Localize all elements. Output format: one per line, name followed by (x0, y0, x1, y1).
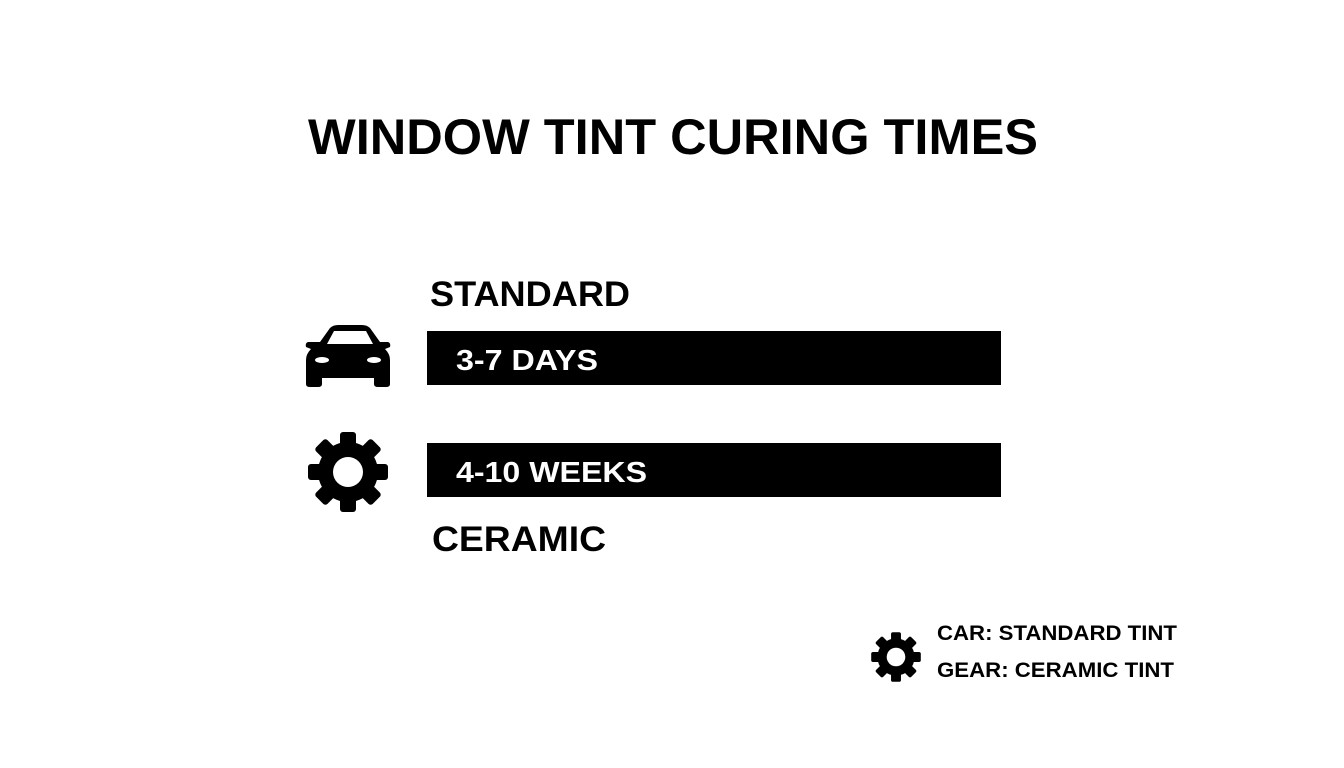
label: ceramic: CERAMIC (432, 520, 606, 559)
bar: ceramic: 4-10 WEEKS (456, 457, 647, 489)
title: WINDOW TINT CURING TIMES (308, 109, 1038, 165)
bar: standard: 3-7 DAYS (456, 345, 598, 377)
icon: gear (308, 432, 388, 512)
legend: GEAR: CERAMIC TINT (937, 659, 1174, 682)
icon: car (306, 325, 390, 387)
legend (871, 622, 1177, 682)
legend: CAR: STANDARD TINT (937, 622, 1177, 645)
label: standard: STANDARD (430, 275, 630, 314)
bar: standard (427, 331, 1001, 385)
icon: legend gear (871, 632, 921, 682)
bar: ceramic (427, 443, 1001, 497)
